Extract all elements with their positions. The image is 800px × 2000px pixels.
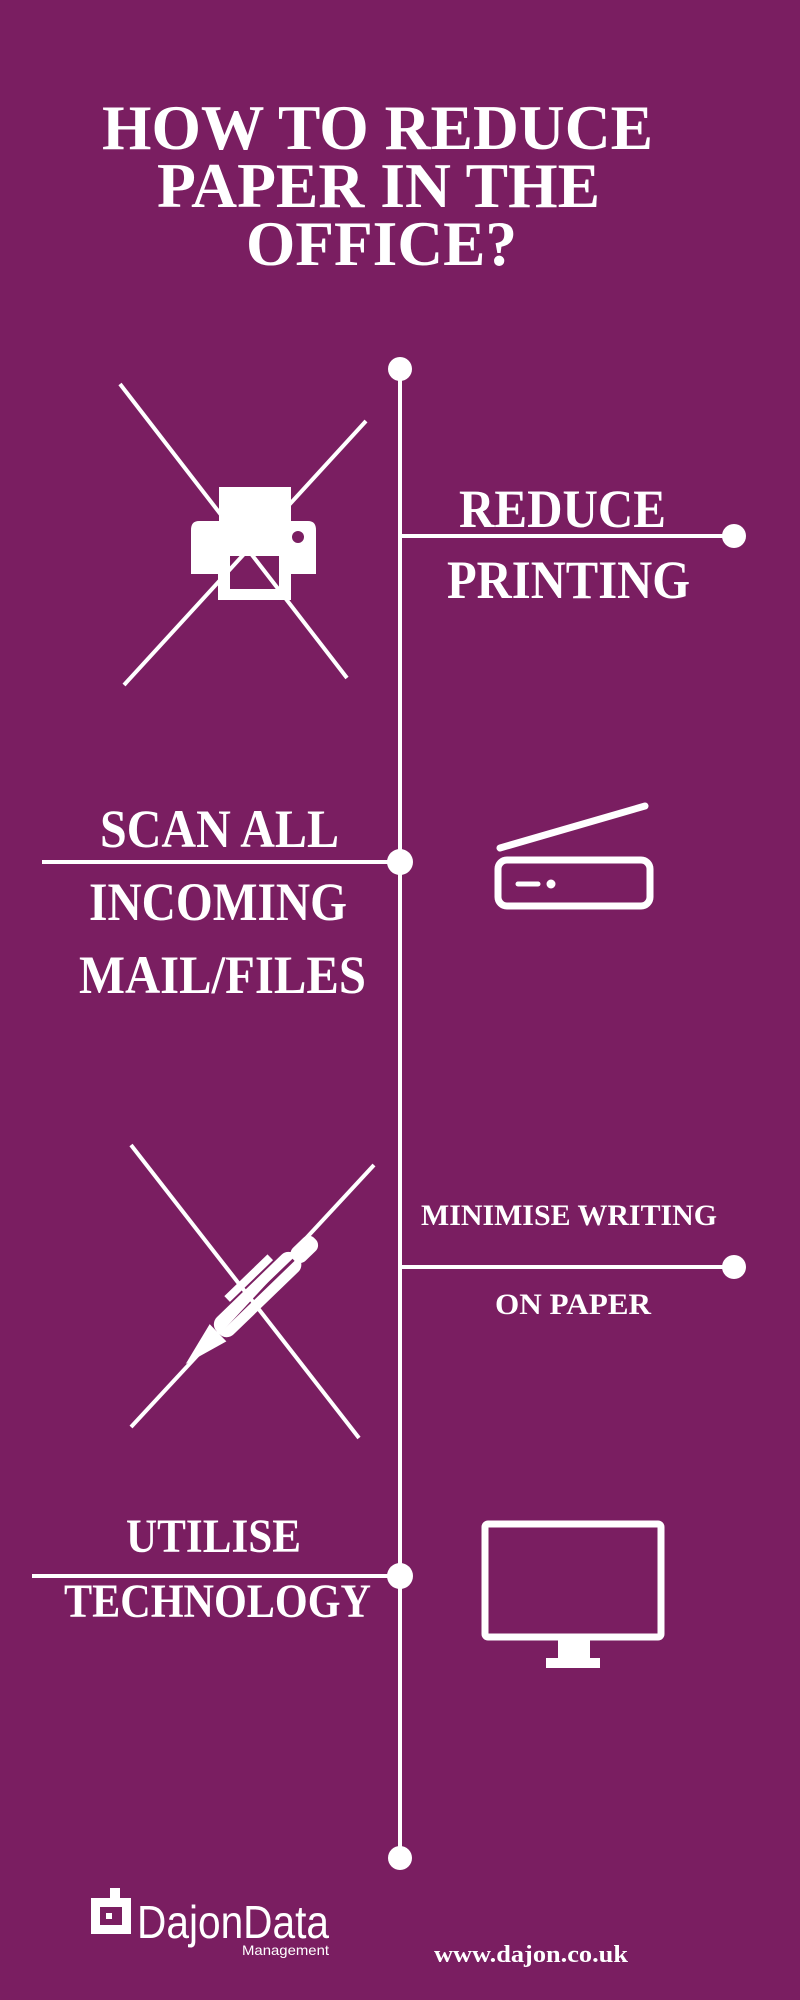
logo: DajonData Management: DajonData [137, 1896, 329, 1948]
text: utilise technology [64, 1510, 371, 1628]
footer url: www.dajon.co.uk [434, 1942, 629, 1968]
text: reduce printing [447, 479, 690, 610]
text: utilise technology: UTILISE [126, 1510, 301, 1563]
text: scan all incoming mail/files: MAIL/FILES [79, 945, 366, 1005]
text: minimise writing on paper: ON PAPER [495, 1288, 651, 1321]
icon: crossed printer [120, 384, 366, 685]
text: reduce printing: PRINTING [447, 550, 690, 610]
text: reduce printing: REDUCE [459, 479, 666, 539]
timeline [32, 357, 746, 1870]
text: minimise writing on paper [421, 1199, 717, 1321]
title [102, 92, 653, 279]
icon: scanner [498, 806, 650, 906]
text: scan all incoming mail/files [79, 799, 366, 1005]
icon: crossed pen [131, 1145, 374, 1438]
text: scan all incoming mail/files: INCOMING [89, 872, 347, 932]
title: HOW TO REDUCE [102, 92, 653, 163]
text: scan all incoming mail/files: SCAN ALL [100, 799, 339, 859]
title: PAPER IN THE [157, 150, 600, 221]
logo: DajonData Management: Management [242, 1942, 329, 1958]
text: minimise writing on paper: MINIMISE WRITING [421, 1199, 717, 1232]
title: OFFICE? [246, 208, 517, 279]
logo: DajonData Management [91, 1888, 329, 1958]
icon: monitor [485, 1524, 661, 1668]
text: utilise technology: TECHNOLOGY [64, 1575, 371, 1628]
